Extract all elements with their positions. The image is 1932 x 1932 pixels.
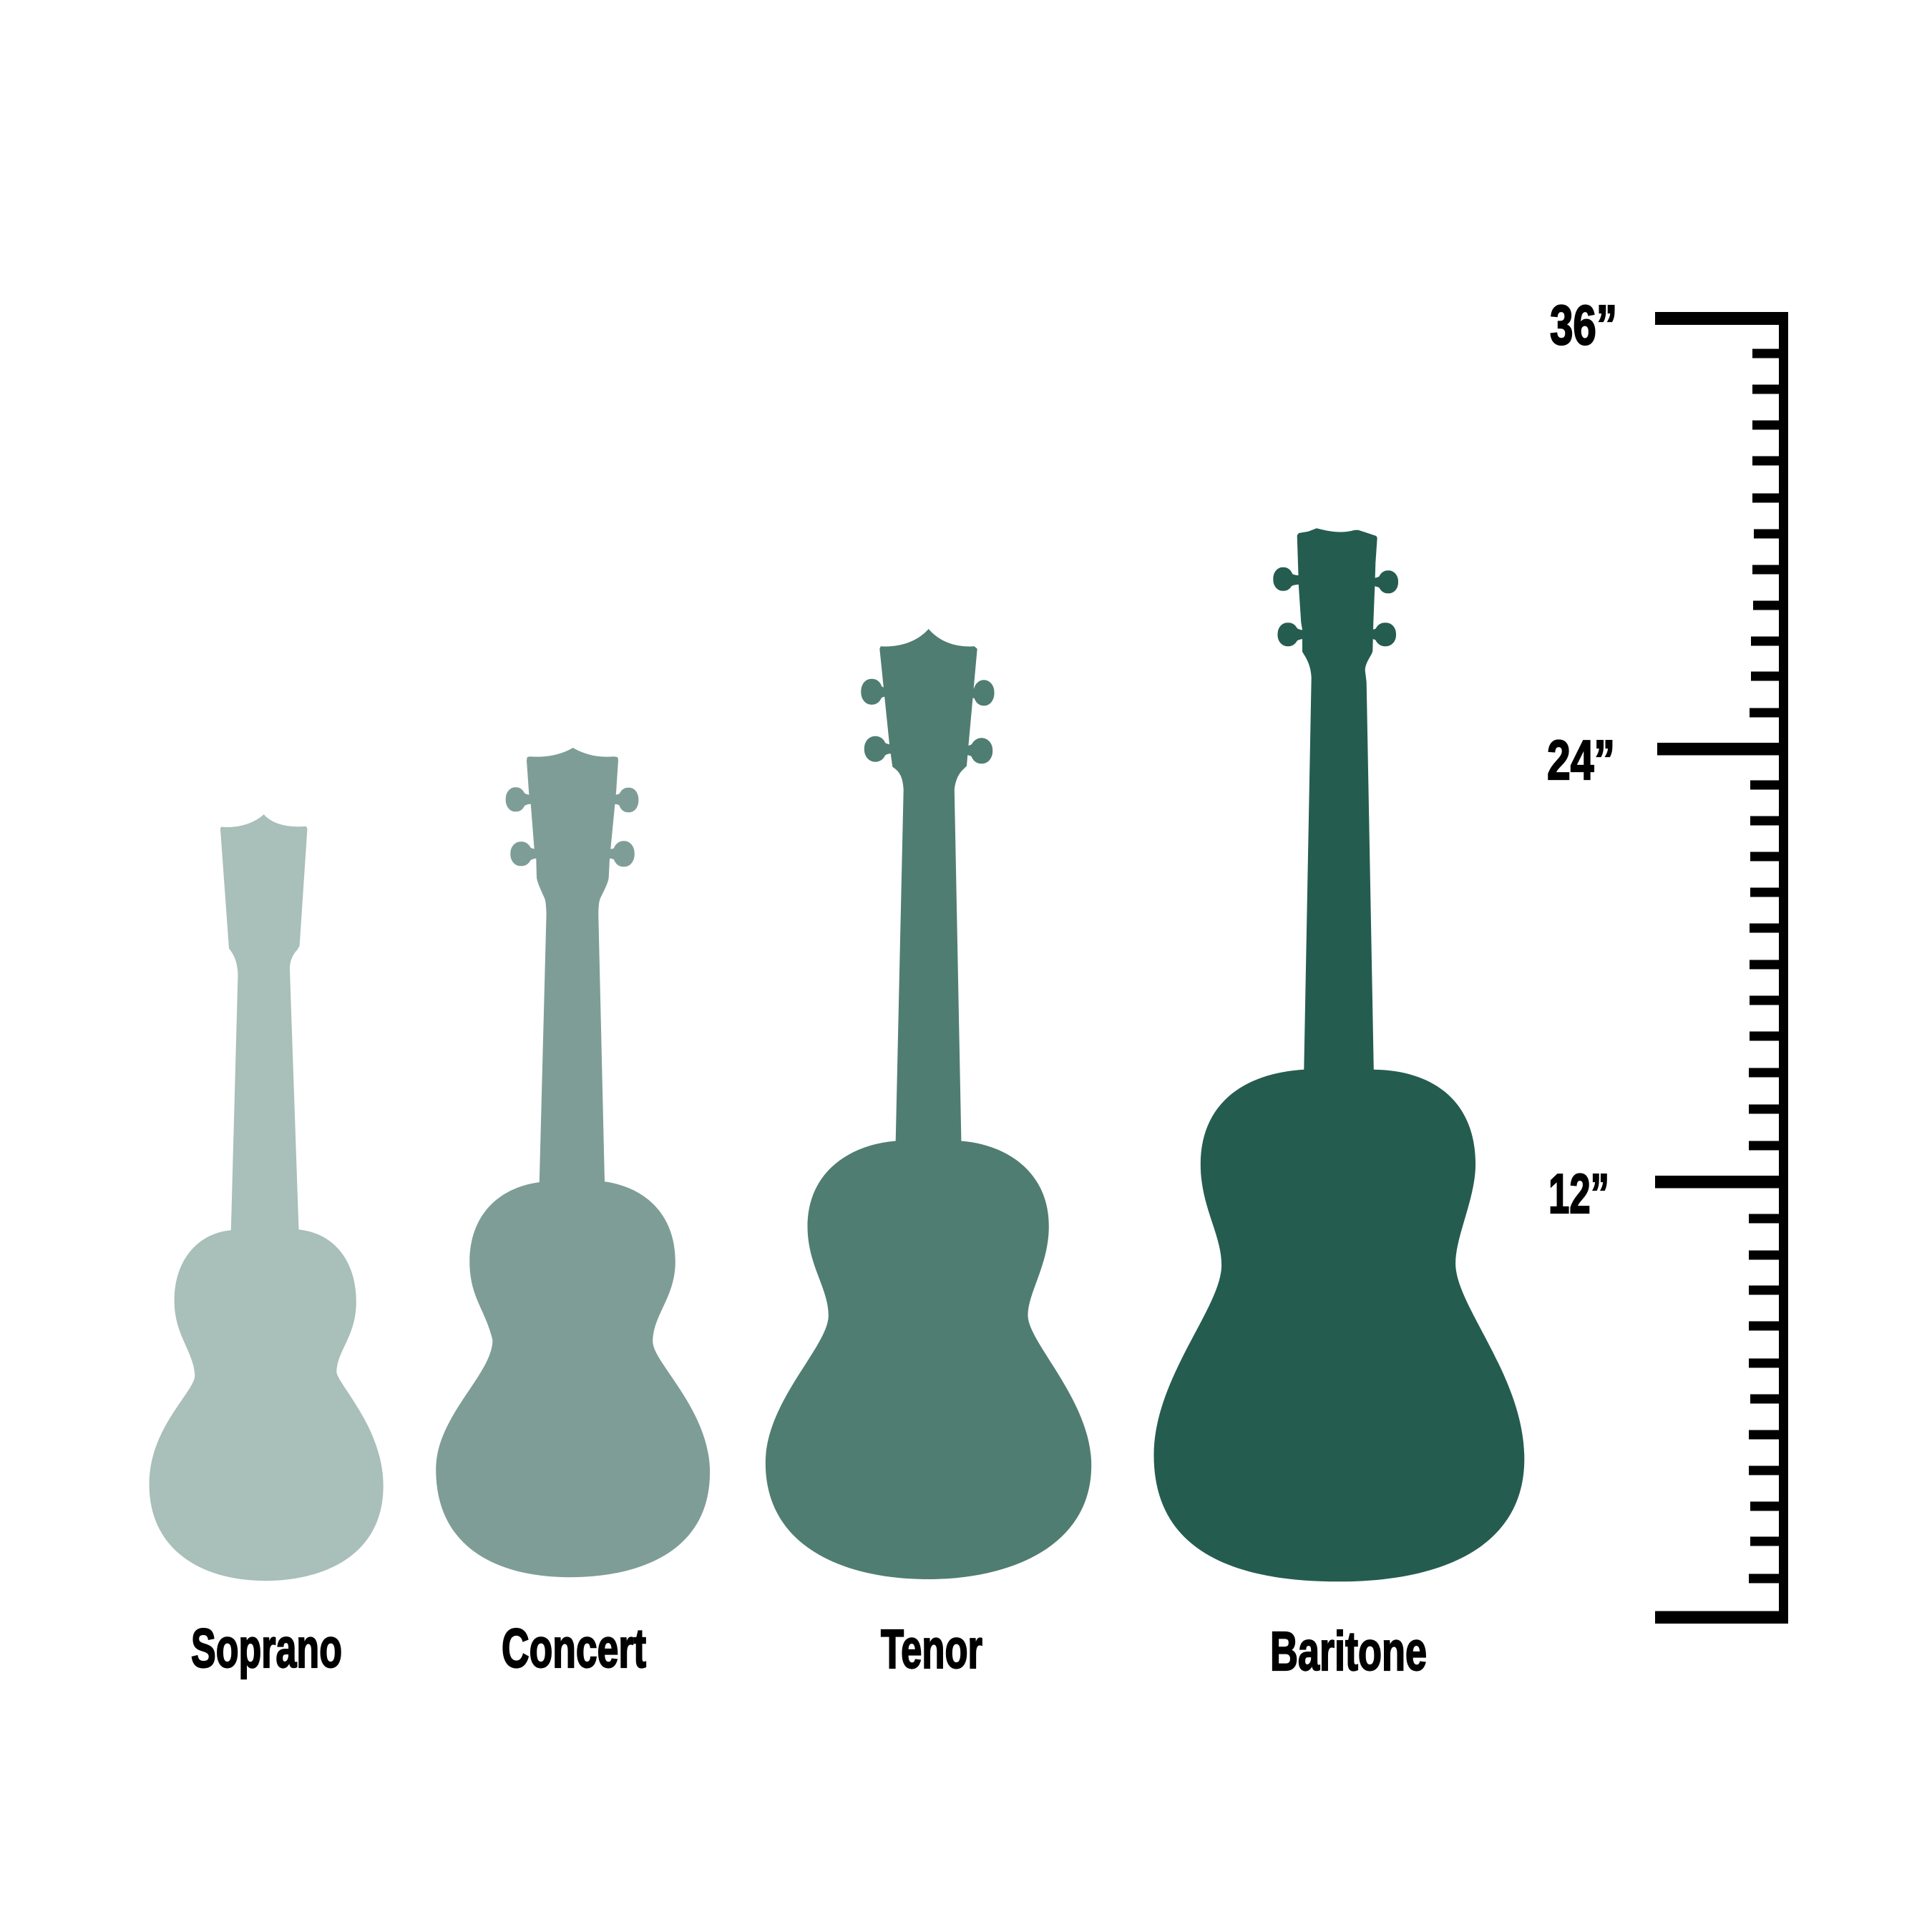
ukulele: baritone [1153,528,1524,1581]
label: Tenor: Tenor [881,1619,982,1680]
ruler label: 12 inches: 12” [1548,1162,1609,1225]
ukulele: concert [436,748,710,1577]
ruler label: 24 inches: 24” [1547,728,1615,791]
label: Soprano: Soprano [191,1618,342,1679]
label: Concert: Concert [502,1618,646,1679]
ruler label: 36 inches: 36” [1550,293,1617,356]
height ruler [1655,312,1788,1624]
ukulele: soprano [149,814,384,1581]
ukulele: tenor [766,629,1091,1579]
label: Baritone: Baritone [1270,1621,1427,1682]
